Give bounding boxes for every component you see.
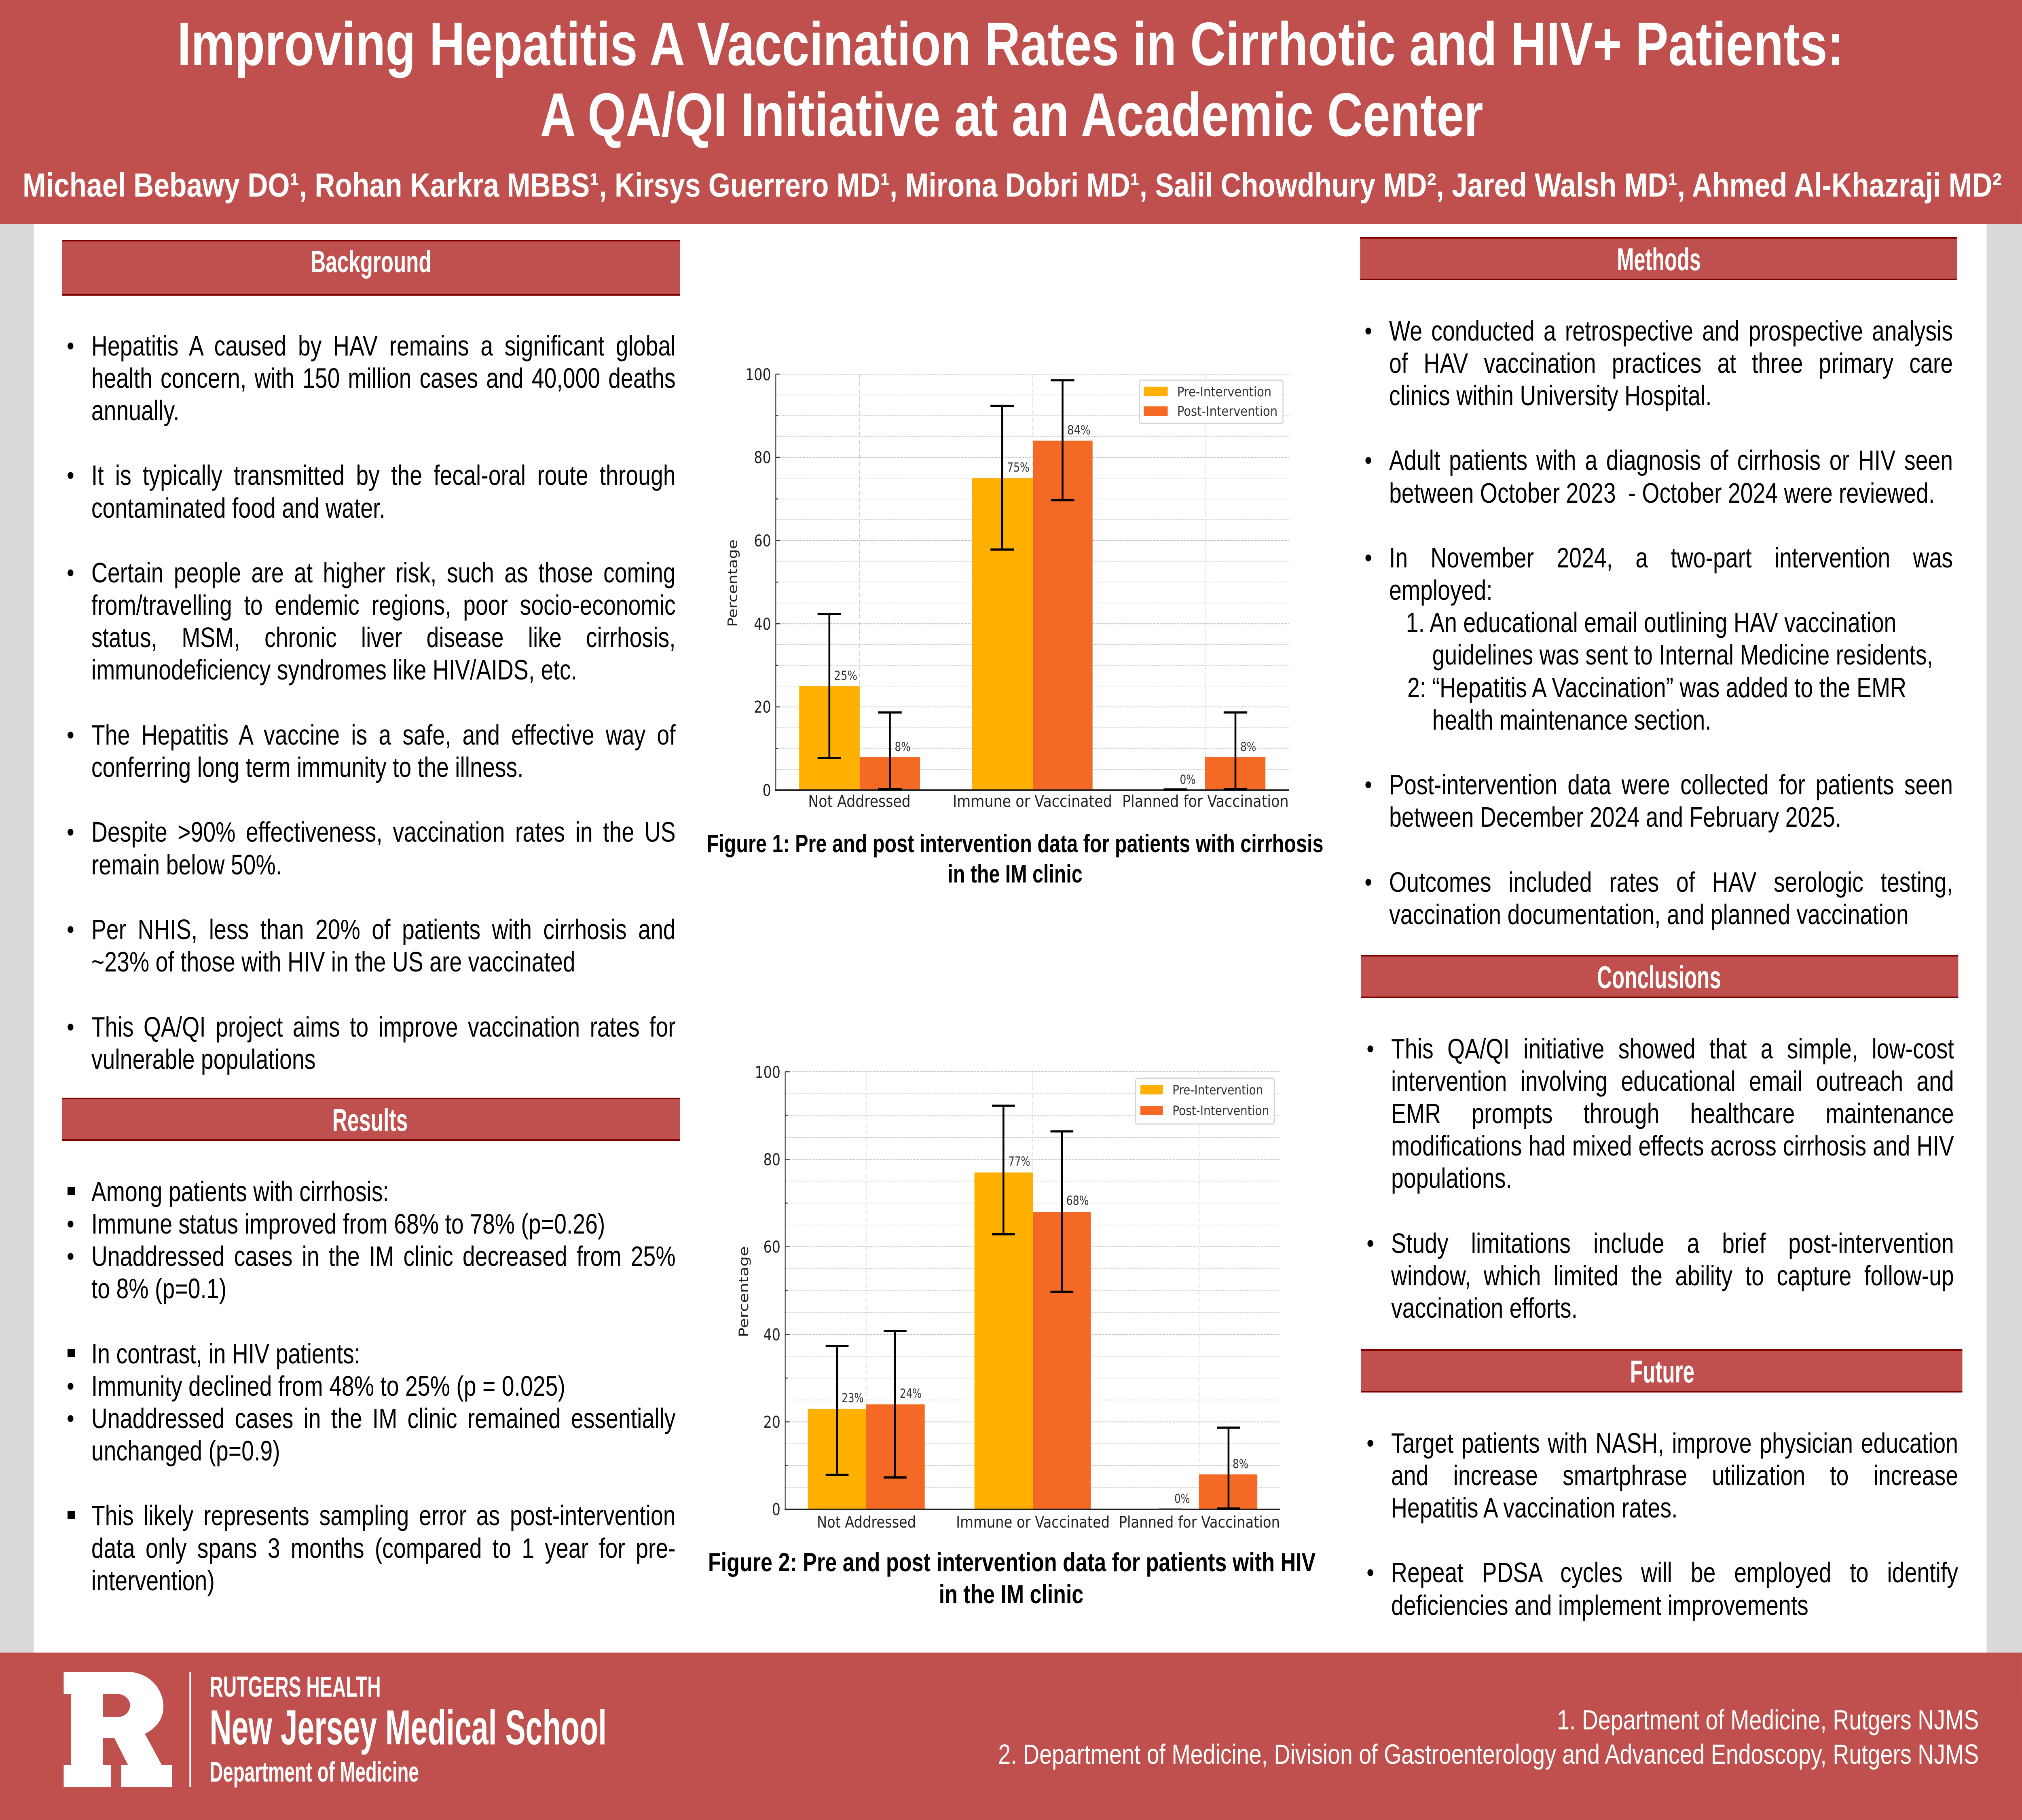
bullets: HIV results [91,1337,676,1467]
y axis tick labels: 40 [754,615,771,634]
error bars [818,380,1247,789]
bullet: vaccine: conferring long term immunity to the illness. [91,751,524,783]
legend: Pre-Intervention [1172,1083,1263,1098]
x axis category labels: Planned for Vaccination [1119,1513,1280,1532]
bullet: main finding: modifications had mixed effects across cirrhosis and HIV [1391,1130,1954,1162]
bullet: interpretation: This likely represents sampling error as post-intervention [91,1500,676,1531]
affiliations [998,1705,1979,1770]
value labels: 25% [834,669,857,683]
chart: HIV bar chart [737,1063,1280,1532]
caption: figure 2 [708,1547,1316,1609]
y axis tick labels: 0 [762,781,771,800]
bullet: targets: and increase smartphrase utilization to increase [1391,1460,1958,1491]
bullet: transmission: contaminated food and water. [91,492,385,524]
bullet: risk groups: status, MSM, chronic liver disease like cirrhosis, [91,622,676,653]
bullets: cirrhosis results: Unaddressed cases in the IM clinic decreased from 25% [91,1240,676,1272]
value labels: 84% [1067,423,1091,438]
panel: future [1361,1349,1962,1623]
y axis title: Percentage [725,540,740,627]
bullet: disease burden: health concern, with 150 million cases and 40,000 deaths [91,362,676,394]
bullet: risk groups [91,557,676,686]
logo wordmark: Department of Medicine [209,1756,419,1788]
heading: methods [1360,237,1957,280]
y axis tick labels: 100 [755,1063,780,1082]
bullet: population: between October 2023 - October 2024 were reviewed. [1389,477,1935,509]
bullet: population: Adult patients with a diagnosis of cirrhosis or HIV seen [1389,444,1953,476]
legend [1139,380,1283,423]
bullet: disease burden [91,330,676,427]
title [177,9,1844,149]
y axis tick labels: 20 [754,698,771,717]
y axis tick labels: 80 [764,1150,780,1169]
bullets: HIV results: In contrast, in HIV patients: [91,1338,360,1369]
heading: results: Results [332,1103,408,1138]
value labels: 0% [1180,772,1196,787]
y axis tick labels [745,365,771,800]
side margin: left gray strip [0,224,34,1653]
bullet: main finding: intervention involving educational email outreach and [1391,1065,1954,1097]
bullet: outcomes: vaccination documentation, and planned vaccination [1389,899,1909,930]
heading: background [62,240,680,296]
bullet: interpretation: intervention) [91,1565,215,1596]
error bars [826,1106,1240,1509]
x axis category labels [817,1513,1280,1532]
title: Improving Hepatitis A Vaccination Rates in Cirrhotic and HIV+ Patients: [177,9,1844,78]
panel: methods [1360,237,1957,933]
axes [776,374,780,791]
bars: post-intervention [860,441,1265,790]
bars: post-intervention [866,1212,1257,1509]
bullet: vaccination rates: Despite >90% effectiveness, vaccination rates in the US [91,816,676,848]
text block: conclusions bullets [1391,1033,1954,1324]
logo wordmark [209,1671,607,1788]
bullet: main finding: This QA/QI initiative showed that a simple, low-cost [1391,1033,1954,1064]
bullet: risk groups: from/travelling to endemic regions, poor socio-economic [91,589,676,621]
value labels: 0% [1174,1492,1190,1506]
legend: Post-Intervention [1177,404,1277,419]
bullet: targets: Target patients with NASH, improve physician education [1391,1427,1958,1459]
bullet: limitations: vaccination efforts. [1391,1292,1578,1324]
x axis category labels [808,792,1289,811]
bullet: main finding: EMR prompts through healthcare maintenance [1391,1098,1954,1129]
axes [785,1072,789,1510]
caption: figure 2: Figure 2: Pre and post intervention data for patients with HIV [708,1547,1316,1577]
bullet: main finding: populations. [1391,1162,1512,1194]
bars: pre-intervention [808,1172,1033,1509]
bars: pre-intervention [799,478,1033,790]
value labels: 77% [1008,1154,1030,1169]
footer banner [0,1653,2022,1820]
logo wordmark: RUTGERS HEALTH [209,1671,381,1703]
bullet: intervention: guidelines was sent to Internal Medicine residents, [1432,639,1933,671]
bullet: post-intervention data [1389,768,1953,834]
legend: Pre-Intervention [1177,385,1271,400]
affiliations: 2. Department of Medicine, Division of Gastroenterology and Advanced Endoscopy, Rutgers NJMS [998,1739,1979,1770]
heading: conclusions: Conclusions [1597,960,1721,995]
bullet: NHIS [91,913,676,978]
bullet: study design [1389,315,1953,412]
bullet: PDSA cycles: deficiencies and implement improvements [1391,1589,1808,1621]
x axis category labels: Planned for Vaccination [1122,792,1289,811]
bullet: risk groups: Certain people are at higher risk, such as those coming [91,557,676,588]
bullet: PDSA cycles [1391,1556,1958,1621]
bullet: limitations [1391,1227,1954,1324]
bullet: limitations: Study limitations include a brief post-intervention [1391,1227,1954,1259]
caption: figure 1 [706,830,1323,888]
value labels: 24% [900,1386,922,1401]
caption: figure 1: in the IM clinic [948,860,1083,888]
heading: methods: Methods [1617,242,1701,277]
bullet: limitations: window, which limited the ability to capture follow-up [1391,1260,1954,1291]
x axis category labels: Not Addressed [808,792,911,811]
bullet: disease burden: annually. [91,395,180,426]
value labels: 8% [895,740,911,754]
bullet: main finding [1391,1033,1954,1195]
heading: background: Background [311,245,431,279]
bullet: vaccine: The Hepatitis A vaccine is a safe, and effective way of [91,719,676,751]
heading: future [1361,1349,1962,1393]
bullet: outcomes [1389,866,1953,931]
value labels: 68% [1066,1194,1089,1208]
value labels [842,1154,1248,1506]
bullet: PDSA cycles: Repeat PDSA cycles will be employed to identify [1391,1557,1958,1588]
bullets: cirrhosis results [91,1175,676,1305]
bullet: intervention: health maintenance section. [1432,704,1711,736]
bullet: interpretation: data only spans 3 months (compared to 1 year for pre- [91,1532,676,1564]
y axis tick labels: 100 [745,365,771,384]
y axis tick labels: 20 [764,1413,780,1432]
icon: Rutgers R logo [63,1672,172,1787]
bullets: cirrhosis results: to 8% (p=0.1) [91,1273,226,1304]
bullet: transmission: It is typically transmitted by the fecal-oral route through [91,459,676,491]
bullet: vaccination rates: remain below 50%. [91,849,282,880]
header banner [0,0,2022,224]
x axis category labels: Not Addressed [817,1513,916,1532]
value labels: 23% [842,1391,863,1405]
y axis tick labels: 60 [754,531,771,550]
panel: conclusions [1360,955,1958,1326]
x axis category labels: Immune or Vaccinated [956,1513,1110,1532]
logo divider [189,1672,191,1787]
authors: Michael Bebawy DO¹, Rohan Karkra MBBS¹, Kirsys Guerrero MD¹, Mirona Dobri MD¹, Salil Chowdhury MD², Jared Walsh MD¹, Ahmed Al-Khazraji MD² [23,166,2002,204]
legend [1136,1078,1274,1124]
bullet: study design: clinics within University Hospital. [1389,380,1712,411]
bullet: outcomes: Outcomes included rates of HAV serologic testing, [1389,866,1953,898]
logo wordmark: New Jersey Medical School [209,1699,607,1755]
x axis category labels: Immune or Vaccinated [953,792,1112,811]
caption: figure 2: in the IM clinic [939,1579,1083,1609]
value labels: 8% [1233,1457,1248,1471]
bullets: cirrhosis results: Among patients with cirrhosis: [91,1176,389,1207]
y axis tick labels: 40 [764,1325,780,1344]
bullet: targets [1391,1427,1958,1524]
bullet: disease burden: Hepatitis A caused by HAV remains a significant global [91,330,676,362]
bullet: post-intervention data: Post-intervention data were collected for patients seen [1389,769,1953,800]
value labels [834,423,1256,787]
bullet: intervention: In November 2024, a two-part intervention was [1389,542,1953,574]
title: A QA/QI Initiative at an Academic Center [540,80,1483,149]
bullet: NHIS: ~23% of those with HIV in the US are vaccinated [91,946,575,978]
y axis tick labels: 80 [754,448,771,467]
heading: future: Future [1630,1354,1694,1389]
y axis tick labels [755,1063,780,1519]
bullet: vaccine [91,719,676,783]
bullet: NHIS: Per NHIS, less than 20% of patients with cirrhosis and [91,914,676,945]
figure 1: cirrhosis chart and caption [704,364,1328,894]
text block: methods bullets [1389,315,1953,931]
text block: results bullets [91,1175,676,1597]
bullets: HIV results: Unaddressed cases in the IM clinic remained essentially [91,1403,676,1434]
text block: background bullets [91,330,676,1075]
side margin: right gray strip [1986,224,2022,1653]
bullet: risk groups: immunodeficiency syndromes like HIV/AIDS, etc. [91,654,577,686]
bullet: intervention: employed: [1389,574,1493,606]
figure 2: HIV chart and caption [704,1060,1328,1614]
heading: conclusions [1361,955,1958,998]
bullet: vaccination rates [91,816,676,881]
bullet: transmission [91,459,676,524]
chart: cirrhosis bar chart [725,365,1289,811]
y axis title: Percentage [737,1246,751,1337]
bullet: intervention: 2: “Hepatitis A Vaccination” was added to the EMR [1407,672,1906,703]
bullet: post-intervention data: between December 2024 and February 2025. [1389,801,1841,833]
panel: results [62,1098,680,1599]
bullet: project aim: vulnerable populations [91,1043,315,1075]
bullet: project aim: This QA/QI project aims to improve vaccination rates for [91,1011,676,1043]
bullet: targets: Hepatitis A vaccination rates. [1391,1492,1677,1524]
bullet: study design: We conducted a retrospective and prospective analysis [1389,315,1953,347]
heading: results [62,1098,680,1141]
bullet: intervention: 1. An educational email outlining HAV vaccination [1406,607,1896,638]
y axis tick labels: 60 [764,1238,780,1257]
bullet: population [1389,444,1953,509]
bullets: HIV results: Immunity declined from 48% to 25% (p = 0.025) [91,1370,565,1402]
value labels: 8% [1240,740,1256,754]
y axis tick labels: 0 [772,1500,780,1519]
bullet: intervention [1389,542,1953,736]
affiliations: 1. Department of Medicine, Rutgers NJMS [1557,1705,1979,1735]
text block: future bullets [1391,1427,1958,1621]
bullet: project aim [91,1011,676,1075]
bullet: interpretation [91,1499,676,1597]
bullets: HIV results: unchanged (p=0.9) [91,1435,280,1467]
bullet: study design: of HAV vaccination practices at three primary care [1389,347,1953,379]
value labels: 75% [1007,460,1030,475]
panel: background [62,240,680,1077]
legend: Post-Intervention [1172,1103,1269,1118]
bullets: cirrhosis results: Immune status improved from 68% to 78% (p=0.26) [91,1208,605,1240]
